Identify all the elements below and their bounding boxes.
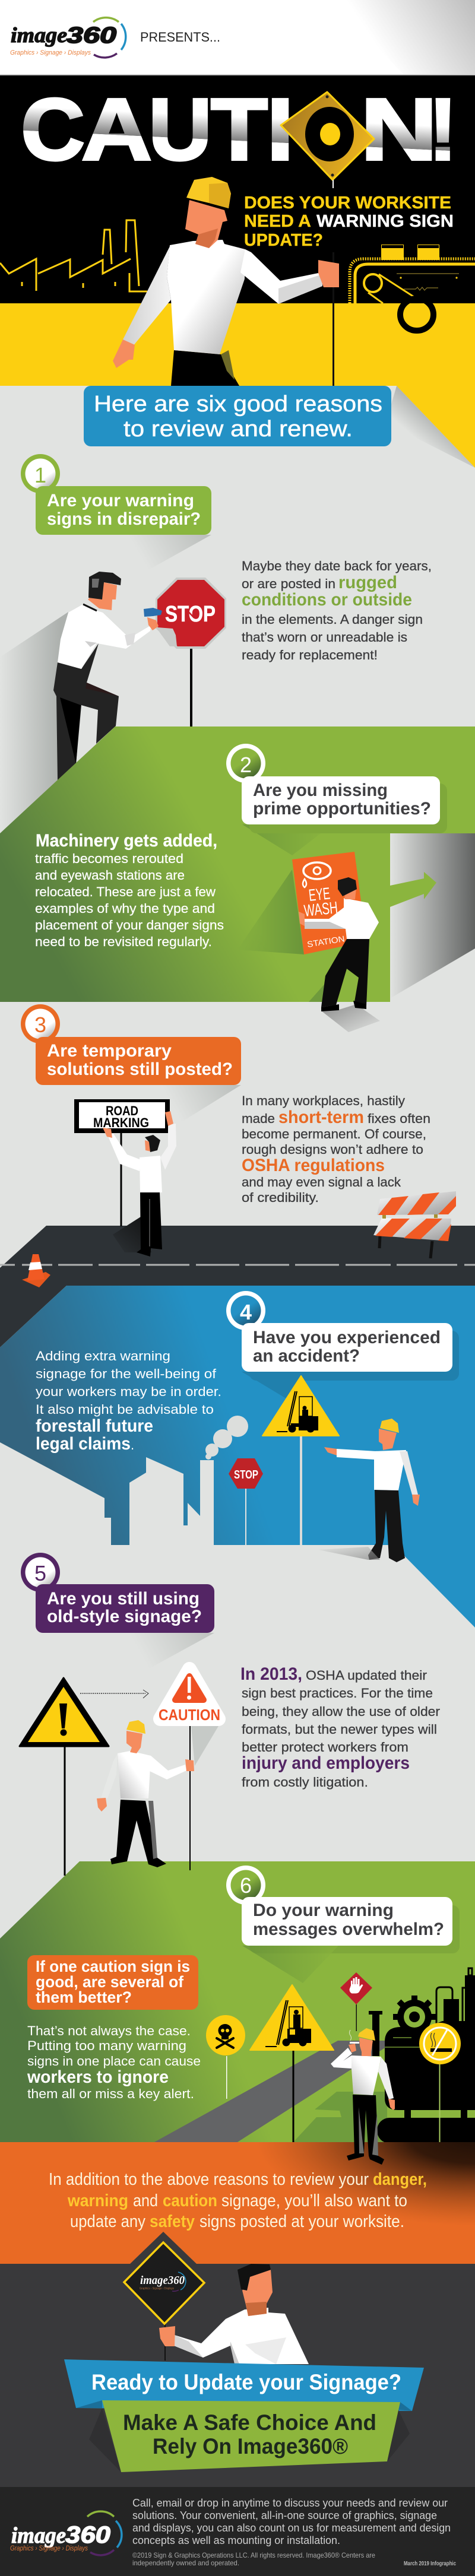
body text 1: in the elements. A danger sign (242, 612, 423, 627)
body text 2: and eyewash stations are (35, 868, 185, 883)
badge 3 (21, 1004, 60, 1043)
illustration: man fixing stop sign (53, 572, 226, 781)
body text 2: placement of your danger signs (35, 918, 224, 932)
body text 4: legal claims (36, 1434, 131, 1454)
worker smoking (331, 2028, 395, 2165)
body text 2: Machinery gets added, (36, 831, 217, 851)
badge 5 (21, 1553, 60, 1592)
road marking sign: MARKING (93, 1115, 149, 1130)
forklift sign 2 (250, 1985, 334, 2142)
caution headline: U (148, 81, 212, 179)
logo: image360: Graphics › Signage › Displays (10, 49, 91, 56)
dark cta panel (0, 2232, 475, 2487)
body text 5: being, they allow the use of older (242, 1704, 440, 1719)
footer contact text: concepts as well as mounting or installation. (132, 2534, 340, 2546)
body text 3: In many workplaces, hastily (242, 1093, 405, 1108)
pole for road marking sign (120, 1131, 122, 1226)
body text 1: rugged (338, 573, 397, 592)
man shadow (0, 612, 68, 833)
stop hand sign (340, 1972, 372, 2031)
badge 4 (226, 1291, 265, 1330)
heading 6: Do your warning (253, 1901, 394, 1920)
body text 4: It also might be advisable to (36, 1402, 214, 1417)
caution headline: C (21, 81, 85, 179)
new caution sign (159, 1669, 220, 1870)
closing paragraph: danger, (373, 2170, 427, 2189)
body text 3: made (242, 1111, 275, 1126)
worker pointing (324, 1419, 420, 1562)
closing paragraph: signs posted at your worksite. (200, 2212, 404, 2231)
intro banner (84, 386, 391, 446)
orange panel (0, 2142, 475, 2264)
heading 1 (36, 486, 211, 535)
body text 6: workers to ignore (27, 2067, 169, 2087)
body text 6: them all or miss a key alert. (27, 2086, 194, 2101)
logo diamond sign: image360 (140, 2274, 185, 2287)
heading 5: old-style signage? (47, 1607, 202, 1626)
sign pole (332, 252, 334, 386)
hero question: NEED A (244, 212, 311, 231)
body text 3: rough designs won’t adhere to (242, 1142, 423, 1157)
man (159, 2264, 309, 2364)
panel 6 green (0, 1861, 475, 2142)
gear (393, 1996, 436, 2038)
closing paragraph: and (133, 2191, 158, 2210)
logo diamond sign (124, 2242, 204, 2324)
caution sign replacing O (281, 92, 374, 188)
heading 5 (36, 1584, 214, 1633)
small stop sign (229, 1458, 263, 1545)
man holding road sign (103, 1111, 176, 1257)
body text 3: fixes often (368, 1111, 430, 1126)
illustration: man with eye wash sign (292, 852, 379, 1011)
closing paragraph: caution (163, 2191, 217, 2210)
logo diamond sign: Graphics › Signage › Displays (140, 2287, 174, 2291)
heading shadow (249, 783, 447, 833)
logo: image360: image (11, 23, 67, 47)
heading 5: Are you still using (47, 1589, 200, 1609)
floor shadow (318, 1547, 380, 1560)
badge 5: 5 (34, 1561, 46, 1585)
caution headline: I (267, 81, 294, 179)
worker with hard hat (113, 177, 339, 386)
man (53, 572, 162, 781)
copyright: ©2019 Sign & Graphics Operations LLC. All rights reserved. Image360® Centers are (132, 2551, 375, 2559)
body text 1 (242, 559, 432, 662)
orange callout: them better? (36, 1988, 132, 2006)
intro banner: to review and renew. (124, 417, 353, 442)
body text 5: sign best practices. For the time (242, 1686, 433, 1701)
body text 6: That’s not always the case. (27, 2023, 191, 2038)
closing paragraph: update any (70, 2212, 145, 2231)
heading 1: Are your warning (47, 491, 194, 510)
closing paragraph: In addition to the above reasons to review your (49, 2170, 369, 2189)
eye wash sign (292, 852, 366, 954)
yellow diagonal corner (386, 386, 475, 468)
green ribbon: Make A Safe Choice And (123, 2410, 376, 2435)
caution headline: ! (429, 81, 457, 179)
heading 2: Are you missing (253, 781, 388, 800)
badge 4: 4 (240, 1300, 252, 1324)
stop sign (156, 578, 226, 649)
forklift warning sign (262, 1376, 339, 1545)
body text 1: Maybe they date back for years, (242, 559, 432, 573)
body text 3: and may even signal a lack (242, 1175, 401, 1189)
body text 3: become permanent. Of course, (242, 1127, 426, 1141)
heading 6: messages overwhelm? (253, 1920, 444, 1939)
man (299, 877, 379, 1011)
copyright: independently owned and operated. (132, 2559, 239, 2567)
body text 1: or are posted in (242, 576, 335, 591)
body text 5: formats, but the newer types will (242, 1722, 437, 1737)
new caution sign: CAUTION (159, 1706, 220, 1724)
green ribbon: Rely On Image360® (153, 2434, 348, 2458)
heading 2: prime opportunities? (253, 799, 431, 819)
pole (164, 2324, 166, 2361)
skull sign (206, 2015, 245, 2099)
stop sign: STOP (165, 602, 216, 627)
body text 5: OSHA updated their (306, 1668, 427, 1683)
body text 3 (242, 1093, 430, 1205)
section 1 shadow (36, 535, 211, 617)
badge 2: 2 (240, 753, 252, 777)
green ribbon (102, 2400, 400, 2472)
date note: March 2019 Infographic (404, 2561, 456, 2567)
eye wash sign: EYE (308, 884, 331, 905)
panel 4 blue (0, 1286, 475, 1628)
hero panel (0, 75, 475, 386)
body text 5: better protect workers from (242, 1740, 408, 1755)
floor shadow (321, 1004, 380, 1032)
barricade (373, 1191, 456, 1258)
panel 2 green (0, 727, 475, 1002)
body text 2: examples of why the type and (35, 901, 215, 916)
header band with logo (0, 0, 475, 75)
section 3 shadow (36, 1085, 241, 1128)
footer logo (10, 2511, 122, 2555)
ribbon folds (76, 2400, 412, 2472)
logo: image360 (10, 18, 126, 58)
body text 5: injury and employers (242, 1753, 410, 1773)
badge 6 (226, 1866, 265, 1905)
body text 2 (35, 831, 224, 949)
badge 3: 3 (34, 1013, 46, 1037)
body text 3: OSHA regulations (242, 1156, 385, 1175)
orange callout: good, are several of (36, 1973, 184, 1991)
body text 4 (36, 1349, 221, 1454)
heading 2 (242, 776, 440, 824)
body text 5 (240, 1664, 440, 1790)
heading 6 shadows (242, 1905, 460, 1983)
closing paragraph: safety (150, 2212, 195, 2231)
copyright (132, 2551, 375, 2567)
traffic cone (22, 1254, 50, 1287)
road marking sign (74, 1099, 170, 1133)
body text 1: that’s worn or unreadable is (242, 630, 407, 645)
footer logo: image (11, 2523, 66, 2548)
body text 3: of credibility. (242, 1190, 319, 1205)
panel 2 shadows (238, 824, 336, 1002)
right grey panel with arrow (390, 833, 475, 998)
body text 2: traffic becomes rerouted (35, 851, 183, 866)
caution headline: A (81, 81, 152, 179)
badge 1: 1 (34, 463, 46, 487)
footer contact text: and displays, you can also count on us for measurement and design (132, 2521, 451, 2534)
body text 5: In 2013, (240, 1664, 302, 1684)
machinery silhouette (369, 1968, 475, 2143)
badge 1 (21, 454, 60, 493)
blue ribbon (64, 2359, 424, 2411)
closing paragraph (49, 2170, 427, 2231)
road marking sign: ROAD (106, 1103, 138, 1118)
heading 1: signs in disrepair? (47, 509, 201, 529)
body text 4: signage for the well-being of (36, 1366, 217, 1381)
blue ribbon: Ready to Update your Signage? (91, 2370, 401, 2394)
factory line art (0, 220, 147, 291)
heading 3: solutions still posted? (47, 1059, 233, 1079)
footer contact text: Call, email or drop in anytime to discuss your needs and review our (132, 2496, 448, 2509)
footer logo: Graphics › Signage › Displays (10, 2544, 88, 2552)
closing paragraph: signage, you’ll also want to (221, 2191, 407, 2210)
old warning triangle (20, 1678, 109, 1876)
caution headline: T (211, 81, 268, 179)
closing paragraph: warning (67, 2191, 128, 2210)
heading 4: Have you experienced (253, 1328, 441, 1347)
caution headline: N (360, 81, 438, 179)
intro banner: Here are six good reasons (94, 392, 382, 417)
hero question: DOES YOUR WORKSITE (244, 193, 451, 212)
body text 3: short-term (278, 1108, 364, 1127)
body text 2: relocated. These are just a few (35, 884, 216, 899)
eye wash sign: WASH (303, 898, 338, 920)
body text 6: signs in one place can cause (27, 2054, 201, 2069)
heading 4 (242, 1323, 452, 1372)
caution headline (21, 81, 457, 179)
body text 2: need to be revisited regularly. (35, 934, 212, 949)
body text 4: forestall future (36, 1416, 153, 1436)
body text 4: Adding extra warning (36, 1349, 170, 1363)
road (0, 1226, 475, 1347)
heading 6 (242, 1897, 452, 1946)
body text 4: . (131, 1438, 134, 1452)
hero question: UPDATE? (244, 231, 323, 250)
ground shadow shape (293, 2092, 387, 2143)
heading 3 (36, 1037, 241, 1085)
body text 1: ready for replacement! (242, 648, 378, 662)
footer contact text (132, 2496, 451, 2546)
section 5 shadow (36, 1633, 214, 1686)
footer (0, 2487, 475, 2576)
heading 4: an accident? (253, 1346, 360, 1366)
body text 6: Putting too many warning (27, 2038, 186, 2053)
body text 5: from costly litigation. (242, 1775, 368, 1790)
heading 3: Are temporary (47, 1041, 172, 1061)
logo: image360: 360 (66, 23, 116, 48)
orange callout: If one caution sign is (36, 1958, 190, 1975)
body text 6 (27, 2023, 201, 2101)
hero question (244, 193, 454, 250)
pole (190, 649, 192, 729)
orange callout (27, 1955, 198, 2010)
footer logo: 360 (65, 2522, 110, 2548)
road in panel 6 (154, 2041, 386, 2142)
eye wash sign: STATION (306, 934, 346, 949)
badge 6: 6 (240, 1873, 252, 1898)
body text 1: conditions or outside (242, 590, 412, 610)
heading 4 shadows (242, 1331, 459, 1401)
presents label: PRESENTS... (140, 30, 220, 45)
worker with caution sign (97, 1720, 194, 1867)
dotted arrow (80, 1690, 148, 1698)
footer contact text: solutions. Your convenient, all-in-one source of graphics, signage (132, 2509, 437, 2521)
body text 4: your workers may be in order. (36, 1384, 221, 1399)
badge 2 (226, 744, 265, 783)
smoke (205, 1416, 248, 1460)
hero question: WARNING SIGN (316, 212, 454, 231)
conveyor machine (350, 245, 475, 331)
no smoking sign (419, 2023, 461, 2143)
small stop sign: STOP (234, 1468, 258, 1481)
cta man holding sign (124, 2242, 309, 2364)
